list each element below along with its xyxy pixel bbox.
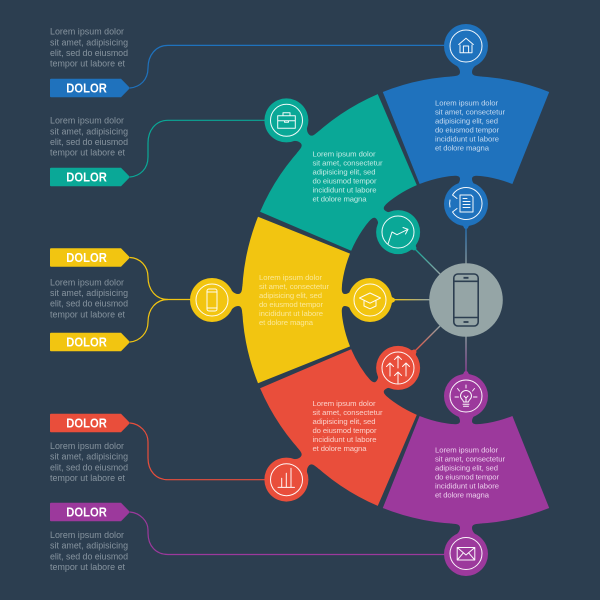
blue text: adipisicing elit, sed xyxy=(435,117,498,126)
text block: left 1: elit, sed do eiusmod xyxy=(50,48,128,58)
text block: left 2: Lorem ipsum dolor xyxy=(50,116,124,126)
panel: purple segment xyxy=(383,371,549,576)
label: yellow dolor bottom: DOLOR xyxy=(66,335,107,350)
red text: do eiusmod tempor xyxy=(312,426,377,435)
text block: left 5: sit amet, adipisicing xyxy=(50,541,128,551)
text block: left 5 xyxy=(50,530,128,572)
icon: up arrows xyxy=(382,352,414,384)
purple text: et dolore magna xyxy=(435,491,490,500)
connector lines to centre hub xyxy=(392,226,466,374)
text block: left 3: sit amet, adipisicing xyxy=(50,288,128,298)
icon: phone large xyxy=(454,274,478,326)
icon: light bulb xyxy=(450,380,482,412)
connector: blue xyxy=(130,45,445,88)
centre hub with phone xyxy=(429,263,503,337)
text block: left 5: elit, sed do eiusmod xyxy=(50,551,128,561)
label: red dolor xyxy=(50,414,130,432)
red sector with bubbles xyxy=(212,291,475,554)
connector: yellow top xyxy=(130,258,191,300)
label: yellow dolor bottom xyxy=(50,333,130,351)
blue text xyxy=(435,99,505,153)
red text: incididunt ut labore xyxy=(312,435,376,444)
text block: left 1: tempor ut labore et xyxy=(50,59,126,69)
icon: house xyxy=(450,30,482,62)
yellow text: sit amet, consectetur xyxy=(259,282,329,291)
label: yellow dolor top xyxy=(50,248,130,267)
teal text: adipisicing elit, sed xyxy=(312,167,376,176)
icon: document xyxy=(450,188,482,220)
yellow text xyxy=(259,273,329,327)
blue sector with bubbles xyxy=(383,24,549,229)
text block: left 4: elit, sed do eiusmod xyxy=(50,462,128,472)
purple text: adipisicing elit, sed xyxy=(435,464,498,473)
icon: phone small xyxy=(196,284,228,316)
blue text: Lorem ipsum dolor xyxy=(435,99,498,108)
text block: left 4 xyxy=(50,441,128,483)
yellow text: do eiusmod tempor xyxy=(259,300,323,309)
yellow text: incididunt ut labore xyxy=(259,309,323,318)
label: yellow dolor top: DOLOR xyxy=(66,250,107,265)
icon: briefcase xyxy=(270,104,302,136)
text block: left 2: tempor ut labore et xyxy=(50,148,126,158)
red text xyxy=(312,399,383,453)
purple text: incididunt ut labore xyxy=(435,482,499,491)
text block: left 3 xyxy=(50,277,128,319)
text block: left 1: sit amet, adipisicing xyxy=(50,37,128,47)
panel: red segment xyxy=(212,291,475,554)
red text: sit amet, consectetur xyxy=(312,408,383,417)
purple text: Lorem ipsum dolor xyxy=(435,446,498,455)
yellow text: Lorem ipsum dolor xyxy=(259,273,322,282)
icon: bar chart xyxy=(270,464,302,496)
text block: left 5: Lorem ipsum dolor xyxy=(50,530,124,540)
panel: teal segment xyxy=(212,46,475,309)
purple sector with bubbles xyxy=(383,371,549,576)
red text: adipisicing elit, sed xyxy=(312,417,376,426)
label: red dolor: DOLOR xyxy=(66,416,107,431)
text block: left 3: Lorem ipsum dolor xyxy=(50,277,124,287)
teal text xyxy=(312,149,383,203)
label: teal dolor xyxy=(50,168,130,186)
connector: purple xyxy=(130,512,445,554)
purple text xyxy=(435,446,505,500)
label: blue dolor xyxy=(50,79,130,97)
text block: left 4: tempor ut labore et xyxy=(50,473,126,483)
teal text: et dolore magna xyxy=(312,194,367,203)
yellow text: et dolore magna xyxy=(259,318,314,327)
purple text: do eiusmod tempor xyxy=(435,473,499,482)
panel: blue segment xyxy=(383,24,549,229)
connector: yellow bottom xyxy=(130,300,168,342)
icon: envelope xyxy=(450,538,482,570)
icon: graduation cap xyxy=(354,284,386,316)
text block: left 1: Lorem ipsum dolor xyxy=(50,27,124,37)
teal text: incididunt ut labore xyxy=(312,185,376,194)
text block: left 3: tempor ut labore et xyxy=(50,309,126,319)
connector: red xyxy=(130,423,266,480)
blue text: et dolore magna xyxy=(435,144,490,153)
text block: left 4: sit amet, adipisicing xyxy=(50,452,128,462)
label: purple dolor xyxy=(50,503,130,521)
red text: et dolore magna xyxy=(312,444,367,453)
connector: teal xyxy=(130,120,266,177)
blue text: incididunt ut labore xyxy=(435,135,499,144)
red text: Lorem ipsum dolor xyxy=(312,399,376,408)
text block: left 2: sit amet, adipisicing xyxy=(50,126,128,136)
text block: left 1 xyxy=(50,27,128,69)
text block: left 2: elit, sed do eiusmod xyxy=(50,137,128,147)
purple text: sit amet, consectetur xyxy=(435,455,505,464)
teal text: do eiusmod tempor xyxy=(312,176,377,185)
label: teal dolor: DOLOR xyxy=(66,170,107,185)
blue text: sit amet, consectetur xyxy=(435,108,505,117)
text block: left 2 xyxy=(50,116,128,158)
icon: trend chart xyxy=(382,216,414,248)
text block: left 3: elit, sed do eiusmod xyxy=(50,299,128,309)
yellow text: adipisicing elit, sed xyxy=(259,291,322,300)
teal sector with bubbles xyxy=(212,46,475,309)
yellow sector with bubbles xyxy=(190,217,395,383)
teal text: sit amet, consectetur xyxy=(312,158,383,167)
blue text: do eiusmod tempor xyxy=(435,126,499,135)
label: purple dolor: DOLOR xyxy=(66,505,107,520)
teal text: Lorem ipsum dolor xyxy=(312,149,376,158)
label: blue dolor: DOLOR xyxy=(66,81,107,96)
panel: yellow segment xyxy=(190,217,395,383)
text block: left 5: tempor ut labore et xyxy=(50,562,126,572)
text block: left 4: Lorem ipsum dolor xyxy=(50,441,124,451)
